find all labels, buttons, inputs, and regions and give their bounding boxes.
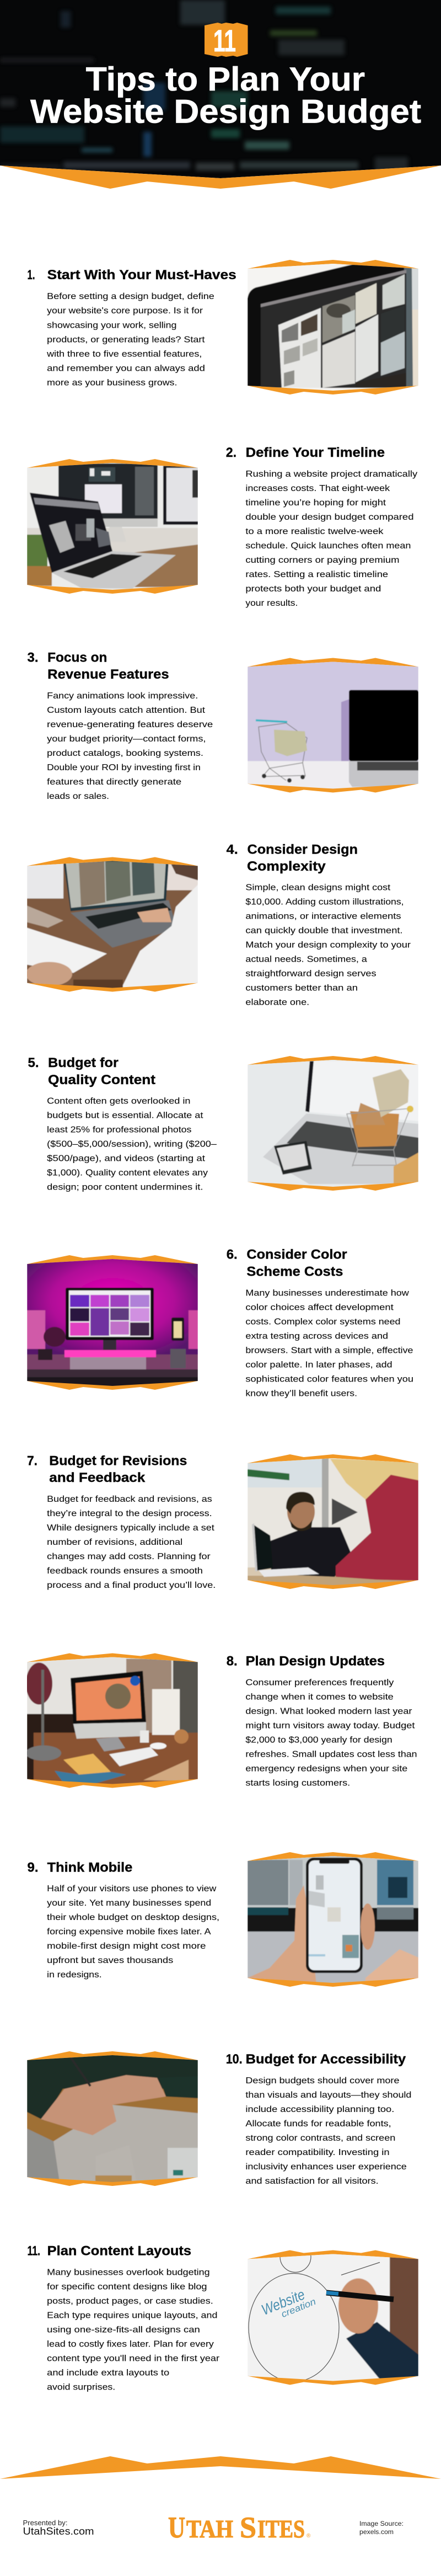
panel: tip 6 [27,1247,413,1398]
text: tip 3: revenue-generating features deserve [47,720,213,729]
image source: Image Source: [359,2520,404,2527]
presented by: Presented by: [23,2519,67,2527]
text: tip 5: $500/page), and videos (starting at [47,1154,206,1164]
heading: tip 9: Think Mobile [47,1860,132,1875]
heading: tip 7: and Feedback [49,1470,146,1485]
text: tip 6: sophisticated color features when you [245,1375,413,1384]
text: tip 5: ($500–$5,000/session), writing ($200– [47,1140,217,1149]
panel: tip 10 [27,2051,411,2186]
logo: Utah Sites: ITES [257,2515,305,2543]
text: tip 10: strong color contrasts, and screen [245,2134,395,2143]
image: laptop and desktop monitors [27,459,198,594]
text: tip 1: with three to five essential features, [46,349,202,359]
text: tip 2: double your design budget compared [245,513,413,522]
text: tip 5: budgets but is essential. Allocate at [47,1111,203,1121]
heading: tip 11: 11. [28,2243,40,2258]
heading: tip 10: Budget for Accessibility [246,2052,406,2067]
image: hands writing in notebook [27,2051,198,2186]
logo: Utah Sites: ® [306,2533,311,2539]
heading: tip 11: Plan Content Layouts [47,2243,191,2258]
text: tip 11: avoid surprises. [47,2383,115,2392]
header background photo [0,0,441,182]
logo: Utah Sites: U [168,2511,185,2544]
heading: tip 3 [28,650,169,682]
text: tip 2: cutting corners or paying premium [245,556,399,565]
panel: tip 9 [28,1852,418,1987]
text: tip 7: While designers typically include a set [47,1523,214,1533]
heading: tip 6 [227,1247,347,1279]
heading: tip 1: 1. [28,268,35,282]
text: tip 9: forcing expensive mobile fixes later. A [47,1927,211,1937]
text: tip 3: product catalogs, booking systems. [47,749,203,758]
title: Tips to Plan Your [86,61,365,98]
heading: tip 3: Revenue Features [47,667,169,682]
image: hand holding smartphone [248,1852,418,1987]
text: tip 1: Before setting a design budget, define [47,292,214,301]
image: magenta-lit desktop computer [27,1255,198,1390]
text: tip 3: Double your ROI by investing first in [47,763,201,772]
text: tip 10: inclusivity enhances user experience [245,2162,407,2172]
heading: tip 5: Quality Content [48,1073,155,1087]
panel: header [0,0,441,189]
panel: footer [23,2511,404,2544]
image: designer meeting with client [248,1454,418,1589]
text: tip 4: elaborate one. [245,998,309,1007]
text: tip 9: your site. Yet many businesses spend [47,1898,211,1908]
text: tip 2: timeline you’re hoping for might [245,498,386,508]
text: tip 7: number of revisions, additional [47,1538,182,1547]
text: tip 6: extra testing across devices and [245,1332,388,1341]
text: tip 11 [47,2268,220,2392]
text: tip 10: Allocate funds for readable fonts, [245,2119,391,2129]
text: tip 5: Content often gets overlooked in [47,1097,190,1106]
heading: tip 6: Consider Color [246,1247,347,1262]
text: tip 1: products, or generating leads? Start [47,335,205,344]
text: tip 8: change when it comes to website [245,1692,394,1702]
image: hand drawing website diagram on whiteboard: creation [279,2296,318,2319]
text: tip 8: refreshes. Small updates cost less than [245,1750,417,1759]
text: tip 8: starts losing customers. [245,1778,350,1788]
text: tip 11: posts, product pages, or case studies. [47,2297,213,2306]
text: tip 11: for specific content designs like blog [47,2282,207,2292]
text: tip 7: process and a final product you’ll love. [47,1581,216,1590]
text: tip 3: your budget priority—contact forms, [47,734,206,744]
text: tip 1: and remember you can always add [47,364,205,373]
text: tip 3: Fancy animations look impressive. [47,691,198,701]
text: tip 10: than visuals and layouts—they should [245,2090,411,2100]
heading: tip 4: Complexity [247,859,326,874]
text: tip 6: browsers. Start with a simple, effective [245,1346,413,1355]
text: tip 2: increases costs. That eight-week [245,484,390,493]
text: tip 9: upfront but saves thousands [47,1956,173,1965]
image: desktop computer on wooden desk [26,1653,198,1788]
text: tip 4: $10,000. Adding custom illustrations, [245,898,404,907]
text: tip 9 [47,1884,219,1980]
image: people reviewing laptop design [26,857,198,992]
text: tip 8: $2,000 to $3,000 yearly for design [245,1735,392,1745]
text: tip 10: reader compatibility. Investing in [245,2148,390,2157]
panel: tip 1 [28,260,418,394]
text: tip 4 [245,883,411,1007]
text: tip 6: costs. Complex color systems need [245,1318,400,1326]
image source [359,2520,404,2536]
heading: tip 6: 6. [227,1247,238,1262]
text: tip 11: Each type requires unique layouts, and [47,2311,217,2321]
heading: tip 1: Start With Your Must-Haves [47,268,236,282]
heading: tip 4 [227,842,358,874]
heading: tip 9: 9. [28,1860,39,1875]
image: laptop, phone and shopping cart with boxes [248,1056,418,1191]
text: tip 11: lead to costly fixes later. Plan for every [47,2340,214,2349]
text: tip 8 [245,1678,417,1788]
text: tip 5 [47,1097,217,1192]
text: tip 6: know they’ll benefit users. [245,1389,357,1398]
heading: tip 8: 8. [227,1654,238,1668]
heading: tip 7: Budget for Revisions [49,1453,187,1468]
text: tip 9: their whole budget on desktop designs, [47,1913,219,1922]
heading: tip 8: Plan Design Updates [246,1654,385,1668]
logo: Utah Sites [168,2511,311,2544]
text: tip 8: emergency redesigns when your site [245,1764,407,1773]
text: tip 10: include accessibility planning too. [245,2105,394,2114]
text: tip 11: content type you'll need in the first year [47,2354,220,2364]
heading: tip 5: 5. [28,1055,39,1070]
text: tip 4: straightforward design serves [245,969,377,979]
text: tip 2: rates. Setting a realistic timeline [245,570,388,579]
image: hand drawing website diagram on whiteboard [248,2241,418,2385]
text: tip 3: Custom layouts catch attention. But [47,706,206,715]
text: tip 11: and include extra layouts to [47,2369,169,2378]
heading: tip 4: Consider Design [247,842,358,857]
panel: tip 7 [27,1453,418,1590]
text: tip 6: color palette. In later phases, add [245,1361,392,1369]
image: hand drawing website diagram on whiteboard: Website [259,2286,307,2318]
text: tip 2: your results. [245,599,298,608]
text: tip 2: Rushing a website project dramatically [245,470,417,479]
text: tip 7: changes may add costs. Planning for [47,1552,211,1561]
heading: tip 3: Focus on [47,650,107,665]
heading: tip 2: 2. [226,445,236,460]
text: tip 2: to a more realistic twelve-week [245,527,384,536]
panel: tip 2 [27,445,417,608]
logo: Utah Sites: S [240,2511,256,2544]
text: tip 2 [245,470,417,608]
text: tip 2: protects both your budget and [245,584,381,594]
text: tip 9: mobile-first design might cost more [47,1942,206,1951]
title: Website Design Budget [30,93,421,130]
panel: tip 11 [28,2241,418,2392]
text: tip 4: Simple, clean designs might cost [245,883,391,893]
text: tip 4: actual needs. Sometimes, a [245,955,367,964]
text: tip 7: Budget for feedback and revisions, as [47,1495,212,1504]
text: tip 11: using one-size-fits-all designs can [47,2326,200,2335]
text: tip 3 [47,691,213,801]
text: tip 1: more as your business grows. [47,378,177,387]
text: tip 10: and satisfaction for all visitors. [245,2177,379,2186]
logo: Utah Sites: TAH [186,2515,233,2543]
heading: tip 7: 7. [27,1453,37,1468]
image source: pexels.com [359,2528,394,2536]
heading: tip 10: 10. [226,2052,243,2067]
text: tip 8: Consumer preferences frequently [245,1678,394,1687]
image: shopping cart with money and laptop [248,658,418,792]
title [30,61,421,130]
text: tip 8: design. What looked modern last year [245,1706,412,1716]
text: tip 2: schedule. Quick launches often mean [245,541,411,551]
text: tip 4: animations, or interactive elements [245,912,401,921]
number badge: 11 [213,23,236,58]
heading: tip 3: 3. [28,650,39,665]
text: tip 3: features that directly generate [47,777,181,787]
text: tip 6: Many businesses underestimate how [245,1289,409,1298]
panel: tip 8 [26,1653,417,1788]
heading: tip 4: 4. [227,842,238,857]
presented by [23,2519,94,2537]
header orange band [0,166,441,189]
text: tip 1: showcasing your work, selling [47,321,176,330]
panel: tip 4 [26,842,411,1007]
text: tip 1: your website's core purpose. Is it for [47,306,203,316]
heading: tip 7 [27,1453,187,1485]
text: tip 10 [245,2076,411,2186]
text: tip 6: color choices affect development [245,1303,394,1312]
heading: tip 5: Budget for [48,1055,119,1070]
text: tip 4: customers better than an [245,984,358,993]
text: tip 1 [46,292,214,387]
text: tip 11: Many businesses overlook budgeting [47,2268,210,2278]
text: tip 4: Match your design complexity to your [245,941,411,950]
heading: tip 6: Scheme Costs [246,1265,343,1279]
text: tip 4: can quickly double that investment. [245,926,403,936]
heading: tip 2: Define Your Timeline [246,445,385,460]
heading: tip 5 [28,1055,155,1087]
text: tip 8: might turn visitors away today. Budget [245,1721,415,1730]
text: tip 3: leads or sales. [47,792,109,801]
presented by: UtahSites.com [23,2526,94,2537]
text: tip 9: Half of your visitors use phones to view [47,1884,217,1894]
text: tip 7: feedback rounds ensures a smooth [47,1566,203,1576]
text: tip 5: design; poor content undermines it. [47,1183,203,1192]
panel: tip 3 [28,650,418,801]
text: tip 10: Design budgets should cover more [245,2076,400,2086]
text: tip 5: $1,000). Quality content elevates any [47,1169,208,1178]
panel: tip 5 [28,1055,418,1192]
text: tip 6 [245,1289,413,1398]
image: monitor with gallery [248,260,418,394]
text: tip 7: they’re integral to the design process. [47,1509,212,1518]
bottom orange band [0,2456,441,2479]
text: tip 7 [47,1495,216,1590]
text: tip 9: in redesigns. [47,1970,102,1980]
text: tip 5: least 25% for professional photos [47,1126,191,1135]
